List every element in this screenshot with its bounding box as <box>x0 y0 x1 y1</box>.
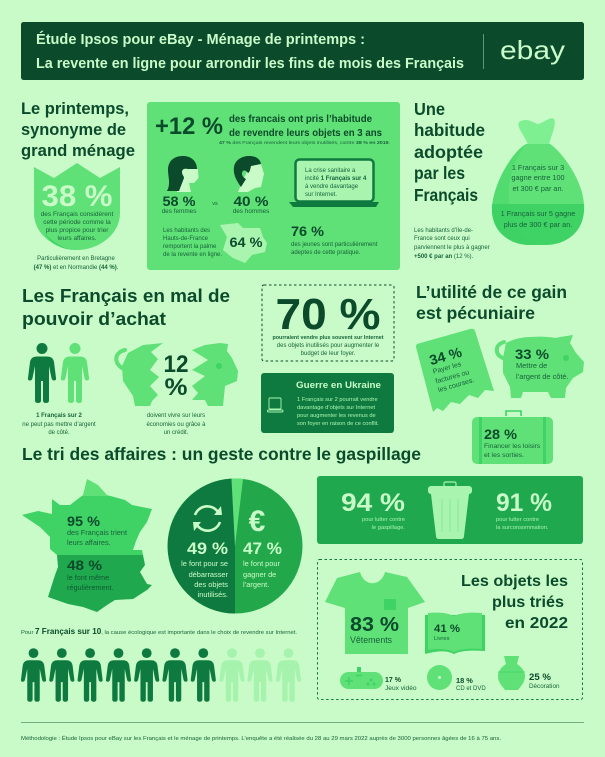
pictogram 7 sur 10 <box>21 648 301 702</box>
callout 70 % <box>262 285 394 361</box>
slice 47 %: le font pour <box>243 559 281 568</box>
money bag: et 300 € par an. <box>512 184 564 193</box>
laptop callout: incité 1 Français sur 4 <box>305 176 367 182</box>
heading: pouvoir d'achat <box>22 285 230 329</box>
icon: woman <box>167 156 198 192</box>
shield 38 %: plus propice pour trier <box>46 227 109 234</box>
stat 91 %: 91 % <box>496 489 552 517</box>
panel: +12 % <box>147 102 400 270</box>
region map 64 %: 64 % <box>230 234 263 250</box>
stat 91 %: pour lutter contre <box>496 517 539 523</box>
slice 49 % <box>181 539 229 599</box>
laptop callout: sur Internet. <box>305 192 337 198</box>
France stat 95 %: 95 % <box>67 513 101 529</box>
book 41 %: 41 % <box>434 623 460 635</box>
panel: Guerre en Ukraine: davantage d’objets sur Internet <box>297 405 376 411</box>
vase 25 % <box>498 656 560 690</box>
receipt 34 %: factures ou <box>435 369 470 385</box>
heading: habitude: Une <box>414 99 445 119</box>
shield 38 %: cette période comme la <box>43 219 111 226</box>
vase 25 %: Décoration <box>529 683 560 690</box>
heading: printemps: grand ménage <box>21 141 135 160</box>
t-shirt 83 %: Vêtements <box>350 635 393 645</box>
heading: printemps: Le printemps, <box>21 99 129 118</box>
t-shirt 83 %: 83 % <box>350 614 399 636</box>
habitude note: parviennent le plus à gagner <box>414 245 490 251</box>
heading: habitude <box>414 99 485 205</box>
suitcase 28 %: 28 % <box>484 426 518 442</box>
receipt 34 % <box>416 329 494 412</box>
ecology sentence: Pour 7 Français sur 10, la cause écologique est importante dans le choix de revendre sur Internet. <box>21 627 297 636</box>
France stat 95 % <box>67 513 127 547</box>
slice 47 % <box>243 539 282 589</box>
stat 91 %: la surconsommation. <box>496 525 549 531</box>
header title <box>36 31 464 72</box>
slice 47 %: 47 % <box>243 539 282 558</box>
laptop callout: La crise sanitaire a <box>305 168 356 174</box>
receipt 34 %: 34 % <box>427 344 464 368</box>
slice 49 %: le font pour se <box>181 559 228 568</box>
money bag: plus de 300 € par an. <box>504 220 572 229</box>
piggy bank 33 %: l’argent de côté. <box>516 372 569 381</box>
disc 18 %: 18 % <box>456 676 473 685</box>
slice 49 %: inutilisés. <box>198 590 228 599</box>
panel intro: de revendre leurs objets en 3 ans <box>229 127 382 139</box>
receipt 34 %: Payer les <box>432 361 463 376</box>
heading: habitude: par les <box>414 163 465 183</box>
slice 49 %: des objets <box>194 580 228 589</box>
France map <box>22 479 152 612</box>
panel: +12 %: 47 % des Français revendent leurs objets inutilisés, contre 38 % en 2019 . <box>219 140 390 145</box>
Hauts-de-France text: remportent la palme <box>163 244 217 250</box>
stat 91 % <box>496 489 552 531</box>
laptop callout <box>289 160 379 207</box>
stat 12 % <box>164 351 188 401</box>
slice 49 %: débarrasser <box>189 570 229 579</box>
suitcase 28 %: et les sorties. <box>484 452 524 459</box>
controller 17 % <box>340 667 417 692</box>
panel: Guerre en Ukraine <box>261 373 394 433</box>
header title: La revente en ligne pour arrondir les fins de mois des Français <box>36 56 464 72</box>
broken piggy bank: économies ou grâce à <box>146 422 206 428</box>
stat 12 %: % <box>164 374 188 401</box>
callout 70 %: budget de leur foyer. <box>301 351 356 357</box>
heading: objets <box>461 573 568 632</box>
vase 25 %: 25 % <box>529 672 551 683</box>
stat 76 % <box>291 223 378 256</box>
shield 38 %: leurs affaires. <box>58 235 97 242</box>
piggy bank 33 %: Mettre de <box>516 361 547 370</box>
money bag: 1 Français sur 3 <box>512 163 564 172</box>
panel: +12 %: vs <box>212 201 218 207</box>
stat 76 %: adeptes de cette pratique. <box>291 250 361 256</box>
Hauts-de-France text: Hauts-de-France <box>163 236 209 242</box>
stat men: 40 % <box>234 193 269 209</box>
panel: objets triés <box>318 560 582 700</box>
piggy bank 33 % <box>497 335 584 398</box>
header banner <box>21 22 584 80</box>
heading: pouvoir d'achat: pouvoir d’achat <box>22 308 166 329</box>
heading: pécuniaire <box>416 282 567 323</box>
broken piggy bank <box>116 343 238 436</box>
pie chart <box>168 478 302 614</box>
France stat 95 %: leurs affaires. <box>67 538 111 547</box>
stat men <box>233 193 269 215</box>
stat +12 %: +12 % <box>155 113 223 140</box>
figures 1 sur 2: de côté. <box>48 430 70 436</box>
suitcase 28 % <box>472 411 553 464</box>
France stat 48 %: le font même <box>67 573 109 582</box>
region map 64 % <box>220 223 267 263</box>
shield note: (47 %) et en Normandie (44 %). <box>34 265 119 271</box>
money bag: gagne entre 100 <box>511 173 565 182</box>
heading: habitude: Français <box>414 185 478 205</box>
slice 49 %: 49 % <box>187 539 228 558</box>
panel: Guerre en Ukraine: son foyer en raison de ce conflit. <box>297 421 379 427</box>
receipt 34 %: les courses. <box>437 377 475 394</box>
piggy bank 33 %: 33 % <box>515 346 550 362</box>
panel intro <box>229 113 382 139</box>
heading: objets: Les objets les <box>461 573 568 590</box>
shield 38 %: des Français considèrent <box>41 211 114 218</box>
France stat 48 % <box>67 557 114 592</box>
France stat 95 %: des Français trient <box>67 528 127 537</box>
icon: bin <box>428 482 472 539</box>
shield 38 %: 38 % <box>42 180 112 213</box>
stat women: des femmes <box>162 208 196 215</box>
heading: pouvoir d'achat: Les Français en mal de <box>22 285 230 306</box>
ebay logo: ebay <box>500 35 565 65</box>
France stat 48 %: régulièrement. <box>67 583 114 592</box>
shield 38 % <box>34 163 120 250</box>
slice 47 %: gagner de <box>243 570 276 579</box>
disc 18 %: CD et DVD <box>456 686 486 692</box>
stat 94 %: pour lutter contre <box>362 517 405 523</box>
heading: tri des affaires: Le tri des affaires : un geste contre le gaspillage <box>22 444 421 464</box>
figures 1 sur 2: ne peut pas mettre d’argent <box>22 422 96 428</box>
icon: man <box>234 156 264 192</box>
heading: pécuniaire: L’utilité de ce gain <box>416 282 567 302</box>
stat 12 %: 12 <box>164 351 188 378</box>
money bag: 1 Français sur 5 gagne <box>501 209 575 218</box>
heading: objets: en 2022 <box>505 615 568 632</box>
methodology: Méthodologie : Étude Ipsos pour eBay sur les Français et le ménage de printemps. L’enquête a été réalisée du 28 au 29 mars 2022 auprès de 3000 personnes âgées de 16 à 75 ans. <box>21 735 501 742</box>
Hauts-de-France text: de la revente en ligne. <box>163 252 222 258</box>
heading: pécuniaire: est pécuniaire <box>416 303 535 323</box>
panel: Guerre en Ukraine: Guerre en Ukraine <box>296 380 381 390</box>
heading: objets: plus triés <box>492 594 564 611</box>
figures 1 sur 2: 1 Français sur 2 <box>36 413 83 419</box>
suitcase 28 %: Financer les loisirs <box>484 443 541 450</box>
header title: Étude Ipsos pour eBay - Ménage de printemps : <box>36 31 365 48</box>
icon: recycle <box>193 506 222 531</box>
Hauts-de-France text <box>163 228 222 258</box>
habitude note: Les habitants d’Ile-de- <box>414 228 473 234</box>
book 41 % <box>425 613 485 654</box>
stat 94 %: le gaspillage. <box>372 525 405 531</box>
Hauts-de-France text: Les habitants des <box>163 228 210 234</box>
t-shirt 83 % <box>325 572 425 654</box>
laptop callout: à vendre davantage <box>305 184 359 190</box>
France stat 48 %: 48 % <box>67 557 103 573</box>
panel: Guerre en Ukraine: 1 Français sur 2 pourrait vendre <box>297 397 378 403</box>
panel: Guerre en Ukraine: pour augmenter les revenus de <box>297 413 376 419</box>
shield note: Particulièrement en Bretagne <box>37 256 116 262</box>
broken piggy bank: un crédit. <box>164 430 189 436</box>
icon: euro: € <box>249 505 266 538</box>
shield note <box>34 256 119 271</box>
callout 70 %: 70 % <box>276 290 380 339</box>
stat 94 % <box>341 489 405 531</box>
habitude note: +500 € par an (12 %). <box>414 254 474 260</box>
disc 18 % <box>427 665 486 692</box>
stat men: des hommes <box>233 208 269 215</box>
figures 1 sur 2 <box>22 343 96 436</box>
stat women <box>162 193 196 215</box>
broken piggy bank: doivent vivre sur leurs <box>147 413 205 419</box>
callout 70 %: pourraient vendre plus souvent sur Internet <box>272 335 384 341</box>
slice 47 %: l’argent. <box>243 580 269 589</box>
controller 17 %: Jeux vidéo <box>385 685 417 692</box>
heading: habitude: adoptée <box>414 142 483 162</box>
habitude note <box>414 228 490 260</box>
heading: habitude: habitude <box>414 120 485 140</box>
heading: printemps: synonyme de <box>21 120 126 139</box>
stat 94 %: 94 % <box>341 489 405 517</box>
stat 76 %: des jeunes sont particulièrement <box>291 242 378 248</box>
panel: gaspillage <box>317 476 583 544</box>
stat women: 58 % <box>162 193 196 209</box>
icon: laptop <box>268 398 283 412</box>
book 41 %: Livres <box>434 636 450 642</box>
heading: printemps <box>21 99 135 160</box>
controller 17 %: 17 % <box>385 677 402 684</box>
habitude note: France sont ceux qui <box>414 236 470 242</box>
money bag <box>492 118 584 245</box>
stat 76 %: 76 % <box>291 223 325 239</box>
panel intro: des francais ont pris l’habitude <box>229 113 372 125</box>
callout 70 %: des objets inutilisés pour augmenter le <box>277 343 380 349</box>
